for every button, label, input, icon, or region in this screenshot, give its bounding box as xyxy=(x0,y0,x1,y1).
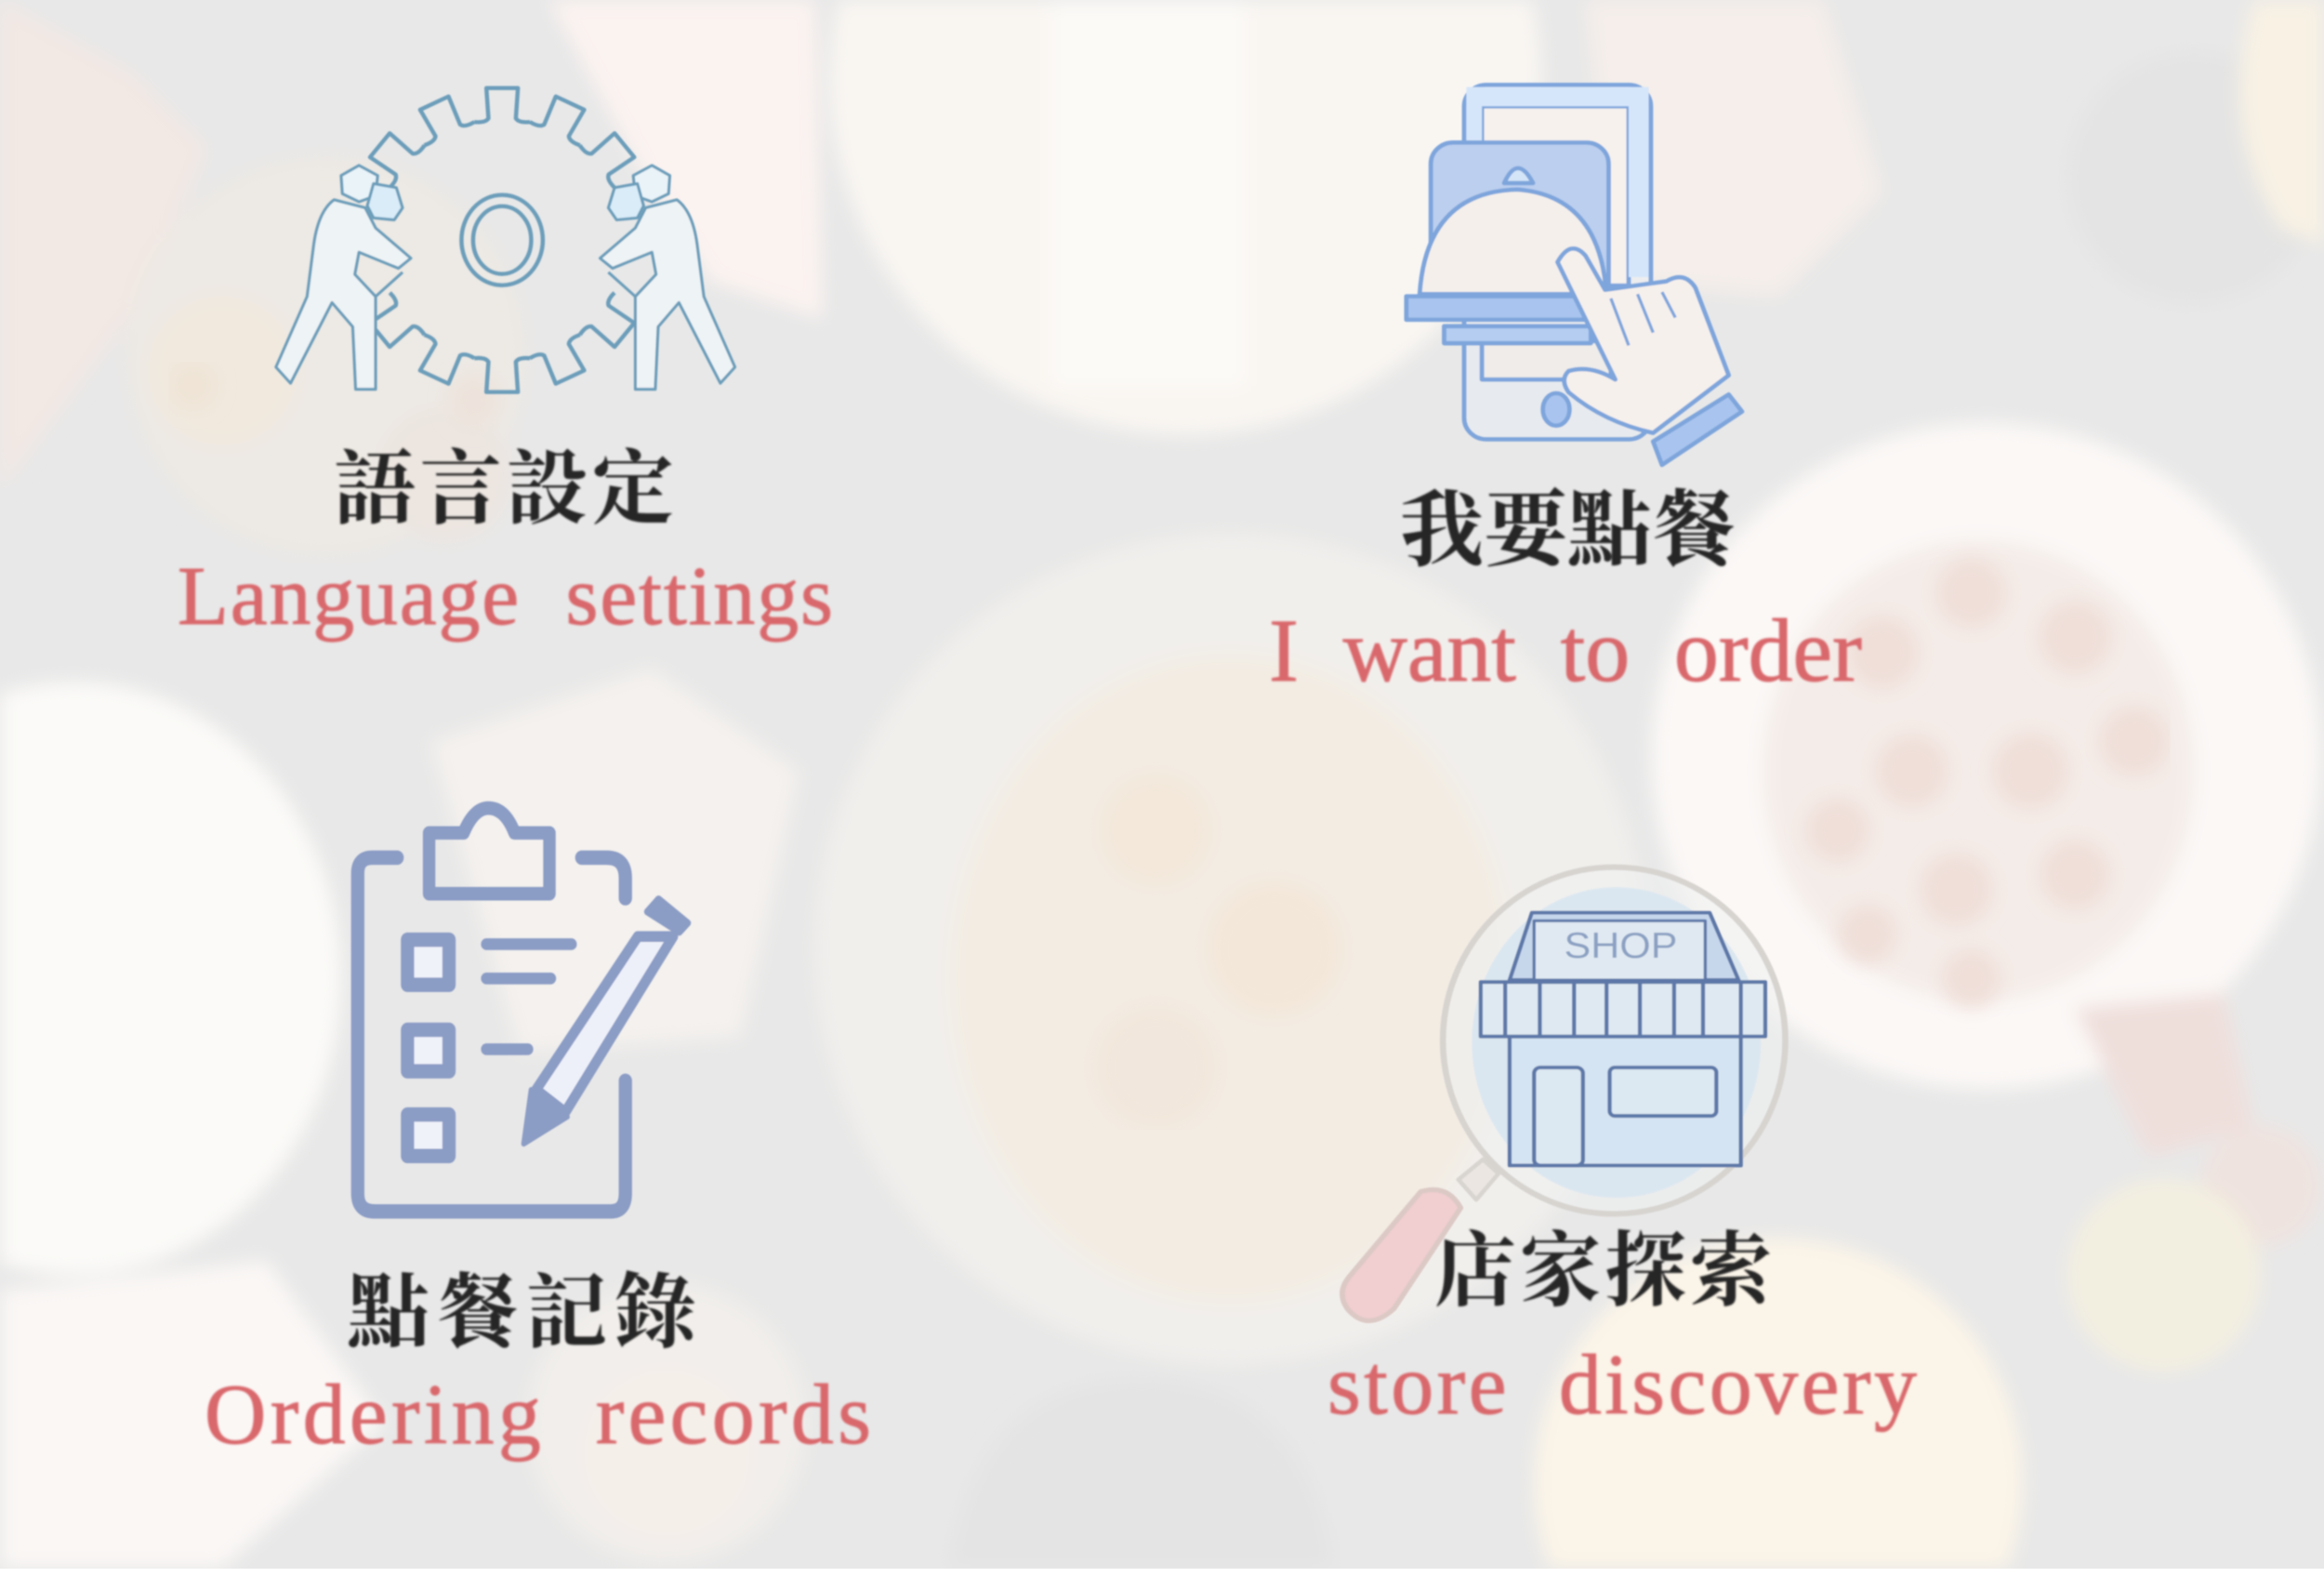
label: I want to order xyxy=(1269,485,1862,700)
label: language settings: 語言設定 xyxy=(334,445,674,536)
label: ordering records: 點餐記錄 xyxy=(348,1269,700,1359)
icon: phone with food cloche and tapping hand xyxy=(1406,85,1742,465)
shop sign text: SHOP xyxy=(1565,925,1677,966)
icon: gear with two workers xyxy=(276,88,735,392)
icon: clipboard checklist with pencil xyxy=(358,808,688,1212)
icon: shop under magnifying glass xyxy=(1342,868,1785,1320)
label: store discovery xyxy=(1327,1227,1917,1432)
label: store discovery: store discovery xyxy=(1327,1337,1917,1432)
label: ordering records xyxy=(205,1269,871,1462)
label: ordering records: Ordering records xyxy=(205,1367,871,1462)
label: I want to order: I want to order xyxy=(1269,601,1862,700)
label: language settings: Language settings xyxy=(178,550,833,643)
label: I want to order: 我要點餐 xyxy=(1400,485,1736,577)
label: language settings xyxy=(178,445,833,643)
label: store discovery: 店家探索 xyxy=(1434,1227,1772,1318)
